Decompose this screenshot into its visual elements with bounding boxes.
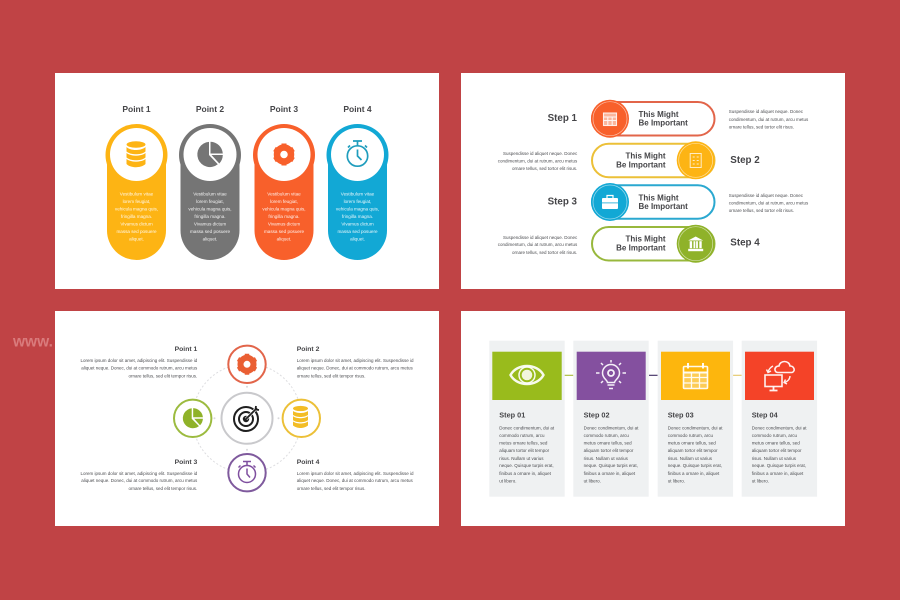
text block: finibus a ornare in, aliquet — [499, 471, 552, 476]
text block: vehicula magna quis, — [115, 206, 158, 212]
icon: calendar — [684, 363, 708, 388]
text block: aliquam tortor elit tempor — [668, 448, 718, 453]
text block: condimentum, dui at rutrum, arcu metus — [498, 242, 578, 247]
text block — [729, 193, 809, 213]
label: This Might — [638, 194, 679, 202]
step 2 row — [498, 141, 760, 179]
text block — [498, 235, 578, 255]
text: Point 3: aliquet neque. Donec, dui at commodo rutrum, arcu metus — [81, 478, 198, 483]
text block: Vivamus dictum — [120, 222, 153, 226]
text block: risus. Nullam ut varius — [584, 456, 629, 461]
text block: lorem feugiat, — [196, 199, 224, 204]
text block: Donec condimentum, dui at — [752, 426, 807, 430]
text block: neque. Quisque turpis erat, — [668, 463, 722, 468]
text block: massa sed posuere — [337, 229, 378, 234]
icon: gear — [274, 144, 294, 166]
text block: vehicula magna quis, — [262, 206, 306, 212]
text block: neque. Quisque turpis erat, — [499, 463, 554, 468]
text block: lorem feugiat, — [123, 199, 150, 204]
text block: Vestibulum vitae — [267, 192, 301, 196]
icon: eye — [510, 366, 544, 384]
card: step 03 — [658, 341, 733, 497]
text: Point 4: Point 4 — [297, 459, 320, 466]
heading: Point 4: Point 4 — [343, 104, 372, 114]
text block: metus ornare tellus, sed — [752, 440, 800, 446]
text: Point 4 — [297, 459, 414, 491]
connector dots — [214, 386, 280, 451]
icon: pie chart — [183, 408, 203, 428]
title: Step 03 — [668, 410, 694, 420]
text block: fringilla magna. — [268, 214, 300, 219]
text block: ut libero. — [668, 478, 685, 484]
step 3 row: Be Important — [638, 202, 688, 211]
panel: four horizontal steps — [461, 73, 845, 289]
icon: computer and cloud — [765, 362, 794, 390]
text block: commodo rutrum, arcu — [752, 433, 797, 438]
text block: neque. Quisque turpis erat, — [584, 463, 638, 468]
text block: aliquet. — [129, 236, 144, 242]
text: Point 2: Lorem ipsum dolor sit amet, adipiscing elit. Suspendisse id — [297, 358, 414, 363]
text block: metus ornare tellus, sed — [499, 440, 548, 446]
text block: Vivamus dictum — [268, 222, 300, 226]
title: Step 02 — [584, 410, 610, 420]
text: Point 2: Point 2 — [297, 346, 320, 353]
text block — [336, 192, 379, 242]
text block: finibus a ornare in, aliquet — [668, 471, 720, 476]
text block: aliquam tortor elit tempor — [584, 448, 634, 453]
text block: vehicula magna quis, — [336, 206, 379, 212]
step title: Step 3 — [548, 196, 578, 208]
node: bottom stopwatch — [228, 454, 266, 491]
step 2 row: Be Important — [616, 160, 666, 170]
text block: massa sed posuere — [264, 229, 304, 234]
step 1 row — [548, 100, 809, 138]
text block: Donec condimentum, dui at — [499, 426, 555, 430]
text block: Suspendisse id aliquet neque. Donec — [503, 151, 578, 156]
connector — [733, 375, 742, 376]
text block: Suspendisse id aliquet neque. Donec — [729, 193, 804, 198]
card: step 01 — [489, 341, 565, 497]
text block — [262, 192, 306, 242]
icon: stopwatch — [347, 141, 368, 166]
text block: risus. Nullam ut varius — [752, 456, 797, 461]
text: Point 4: aliquet neque. Donec, dui at commodo rutrum, arcu metus — [297, 478, 414, 483]
text block: massa sed posuere — [190, 229, 230, 234]
icon: target — [234, 406, 259, 431]
text block: massa sed posuere — [116, 229, 157, 234]
text block: lorem feugiat, — [344, 199, 371, 204]
connector — [649, 375, 658, 376]
text block: ut libero. — [499, 478, 517, 484]
text block: fringilla magna. — [342, 214, 373, 219]
text block: Suspendisse id aliquet neque. Donec — [729, 109, 804, 114]
icon: stopwatch — [238, 462, 256, 482]
pill: blue — [326, 124, 388, 260]
text: Point 4: ornare tellus, sed elit tempor risus. — [297, 486, 365, 491]
text block: commodo rutrum, arcu — [499, 433, 545, 438]
text block: Vestibulum vitae — [341, 192, 375, 196]
text block: metus ornare tellus, sed — [584, 440, 632, 446]
text: Point 3: Point 3 — [175, 459, 198, 466]
text: Point 1: ornare tellus, sed elit tempor risus. — [129, 374, 197, 378]
card: step 04 — [742, 341, 817, 497]
text block — [752, 426, 807, 484]
text block: neque. Quisque turpis erat, — [752, 463, 806, 468]
text block: lorem feugiat, — [270, 199, 298, 204]
text block: finibus a ornare in, aliquet — [584, 471, 636, 476]
heading: Point 1: Point 1 — [122, 104, 151, 114]
icon: pie chart — [197, 142, 223, 167]
text block: ut libero. — [584, 478, 601, 484]
icon: database — [293, 406, 308, 428]
step title: Step 1 — [548, 113, 578, 124]
text block: ornare tellus, sed tortor elit risus. — [512, 250, 577, 255]
title: Step 01 — [499, 410, 525, 420]
node: right database — [283, 400, 320, 437]
text block: commodo rutrum, arcu — [668, 433, 713, 438]
text block — [188, 192, 232, 242]
text block: finibus a ornare in, aliquet — [752, 471, 804, 476]
text: Point 3: Lorem ipsum dolor sit amet, adipiscing elit. Suspendisse id — [80, 471, 198, 476]
text: Point 3 — [80, 459, 198, 491]
text block: ut libero. — [752, 478, 769, 484]
text block — [499, 426, 555, 484]
text block: Vivamus dictum — [194, 222, 226, 226]
watermark text: www. — [12, 334, 53, 350]
step title: Step 2 — [730, 155, 760, 166]
step 1 row: Be Important — [638, 118, 688, 128]
pill: yellow — [106, 124, 168, 260]
text block: aliquet. — [350, 236, 365, 242]
text block: fringilla magna. — [194, 214, 226, 219]
text block: risus. Nullam ut varius — [668, 456, 713, 461]
text: Point 2: aliquet neque. Donec, dui at commodo rutrum, arcu metus — [297, 366, 414, 370]
text block: aliquam tortor elit tempor — [499, 448, 550, 453]
text block: Suspendisse id aliquet neque. Donec — [503, 235, 578, 240]
text: Point 3: ornare tellus, sed elit tempor risus. — [129, 486, 197, 491]
text: Point 1: Point 1 — [175, 346, 198, 353]
text block: Donec condimentum, dui at — [668, 426, 723, 430]
step 4 row: Be Important — [616, 244, 666, 252]
text block: Vivamus dictum — [341, 222, 374, 226]
text block: Vestibulum vitae — [120, 192, 154, 196]
icon: bank — [688, 236, 703, 251]
text block: condimentum, dui at rutrum, arcu metus — [729, 200, 809, 206]
text block: metus ornare tellus, sed — [668, 440, 716, 446]
text block: Vestibulum vitae — [193, 192, 227, 196]
text block: condimentum, dui at rutrum, arcu metus — [498, 158, 578, 164]
text: Point 4: Lorem ipsum dolor sit amet, adipiscing elit. Suspendisse id — [297, 471, 414, 476]
text block: commodo rutrum, arcu — [584, 433, 629, 438]
label: This Might — [626, 152, 666, 160]
text block: aliquet. — [203, 236, 217, 242]
label: This Might — [638, 110, 679, 119]
text block — [498, 151, 578, 171]
label: This Might — [626, 234, 666, 244]
text block: ornare tellus, sed tortor elit risus. — [729, 208, 794, 213]
text: Point 1: aliquet neque. Donec, dui at commodo rutrum, arcu metus — [81, 366, 198, 370]
text: Point 2 — [297, 346, 414, 378]
icon: gear — [238, 354, 256, 375]
icon: briefcase — [602, 196, 618, 209]
text block: fringilla magna. — [121, 214, 152, 219]
panel: four step cards — [461, 311, 845, 526]
panel: four vertical pills — [55, 73, 439, 289]
heading: Point 2: Point 2 — [196, 104, 224, 114]
step 3 row — [548, 183, 809, 221]
text block — [584, 426, 639, 484]
text block: ornare tellus, sed tortor elit risus. — [512, 166, 577, 171]
text block: risus. Nullam ut varius — [499, 456, 544, 461]
text block: Donec condimentum, dui at — [584, 426, 639, 430]
text: Point 1 — [80, 346, 198, 378]
card: step 02 — [573, 341, 649, 497]
icon: light bulb — [596, 360, 626, 388]
text block: ornare tellus, sed tortor elit risus. — [729, 124, 794, 130]
step title: Step 4 — [730, 238, 760, 248]
heading: Point 3: Point 3 — [270, 104, 298, 114]
text block — [729, 109, 809, 130]
connector — [565, 375, 573, 376]
title: Step 04 — [752, 410, 779, 420]
node: left pie — [174, 400, 211, 437]
text: Point 2: ornare tellus, sed elit tempor risus. — [297, 374, 365, 378]
text block: aliquet. — [277, 236, 291, 242]
dashed ring — [192, 364, 302, 473]
text block: condimentum, dui at rutrum, arcu metus — [729, 117, 809, 122]
text block — [668, 426, 723, 484]
icon: calendar — [604, 113, 616, 126]
text block: aliquam tortor elit tempor — [752, 448, 802, 453]
step 4 row — [498, 225, 760, 263]
pill: orange — [253, 124, 315, 260]
pill: gray — [179, 124, 241, 260]
text block: vehicula magna quis, — [188, 206, 232, 212]
center circle with target icon — [222, 393, 272, 444]
text: Point 1: Lorem ipsum dolor sit amet, adipiscing elit. Suspendisse id — [80, 358, 198, 363]
text block — [115, 192, 158, 242]
node: top gear — [228, 346, 266, 383]
icon: database — [126, 141, 146, 167]
panel: radial diagram — [55, 311, 439, 526]
icon: document — [690, 154, 701, 168]
